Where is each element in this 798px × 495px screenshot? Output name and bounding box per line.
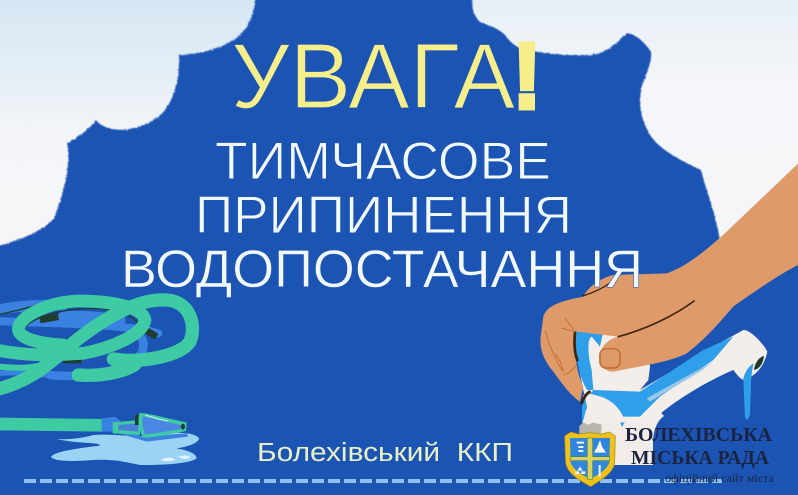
site logo [565,423,774,487]
logo tagline: офіційний сайт міста [665,473,774,485]
blue coil behind [0,305,158,376]
illustration: garden hose [0,298,199,465]
faucet outlet [754,356,764,370]
water drip [743,363,753,420]
shield outer [565,432,615,487]
hand and faucet illustration [540,163,798,465]
logo name: БОЛЕХІВСЬКА [625,425,772,446]
heading: ТИМЧАСОВЕ ПРИПИНЕННЯ ВОДОПОСТАЧАННЯ: ПРИПИНЕННЯ [195,186,572,245]
cloud: top right [472,0,798,240]
title: УВАГА!: УВАГА [231,24,515,128]
heading: ТИМЧАСОВЕ ПРИПИНЕННЯ ВОДОПОСТАЧАННЯ: ТИМЧАСОВЕ [215,132,551,191]
green hose loops [0,300,192,425]
logo name [625,425,772,469]
thumb nail [600,349,620,368]
faucet water highlights [575,327,604,390]
title: УВАГА!: ! [513,24,541,128]
puddle [51,433,199,465]
faucet base water reflection [582,394,640,427]
finger creases [575,282,694,403]
cloud: top left [0,0,256,247]
shield crown [579,423,602,433]
faucet base [582,390,664,465]
faucet spout [577,325,767,423]
heading: ТИМЧАСОВЕ ПРИПИНЕННЯ ВОДОПОСТАЧАННЯ: ВОДОПОСТАЧАННЯ [121,240,643,299]
hose nozzle [102,417,188,442]
logo name: МІСЬКА РАДА [631,448,769,469]
shield cross [571,438,610,479]
shield field [570,438,610,479]
heading: ТИМЧАСОВЕ ПРИПИНЕННЯ ВОДОПОСТАЧАННЯ [121,132,643,299]
dashed ground line [24,479,722,483]
arm and fist [540,163,798,402]
shield symbols [575,440,606,477]
coat of arms [565,423,615,487]
dark shadows [0,298,192,360]
organisation name: Болехівський ККП [257,439,513,467]
